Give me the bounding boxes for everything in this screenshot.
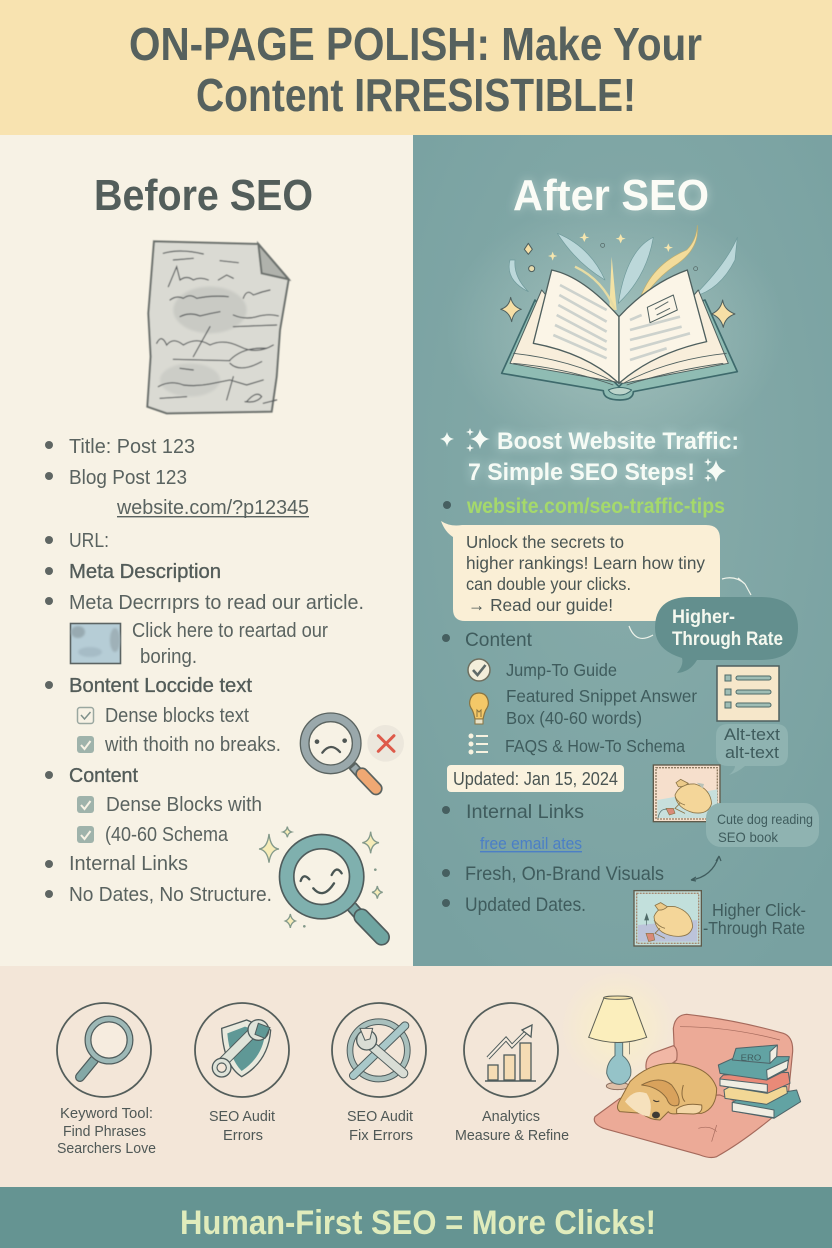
list: after SEO bullets: Updated Dates. [465,894,586,916]
headline: optimized title: Boost Website Traffic: [497,428,739,455]
image: blurry thumbnail [70,624,120,664]
callout: meta description bubble: Unlock the secrets to [466,532,624,552]
label: book cover text: ERO [741,1052,762,1062]
callout: higher through rate: Through Rate [672,629,783,650]
tool: keyword tool: Keyword Tool: [60,1105,153,1122]
callout: alt-text: Alt-text [724,725,780,744]
panel: after SEO [413,135,832,966]
caption: higher click-through rate [703,900,806,938]
list: after SEO bullets: website.com/seo-traffic-tips [466,495,725,518]
list: after SEO bullets: Featured Snippet Answer [506,686,697,706]
tool: SEO audit fix errors: SEO Audit [347,1108,414,1125]
icon: checked box [77,826,94,843]
callout: meta description bubble: can double your clicks. [466,574,631,594]
list: before SEO bullets: Meta Decrrıprs to read our article. [69,591,364,614]
list: before SEO bullets: website.com/?p12345 [116,496,309,519]
list: after SEO bullets: Content [465,629,533,651]
list: before SEO bullets: (40-60 Schema [105,823,229,846]
headline: optimized title: 7 Simple SEO Steps! [468,459,695,486]
arrow: curly connector [691,856,721,881]
list: before SEO bullets: Click here to reartad our [132,619,328,642]
tool: SEO audit errors [195,1003,289,1144]
icon: check circle [468,659,490,681]
image: dog illustration two [634,891,701,946]
list: after SEO bullets: Internal Links [466,801,584,823]
list: before SEO bullets: Blog Post 123 [69,466,187,489]
title [129,18,702,121]
tool: SEO audit fix errors [332,1003,426,1144]
tool: analytics [455,1003,569,1144]
list: before SEO bullets: Title: Post 123 [69,435,195,458]
footer banner [0,1187,832,1248]
label: updated date: Updated: Jan 15, 2024 [453,769,618,789]
icon: sleeping dog [617,1063,717,1120]
icon: crumpled document [147,241,289,413]
list: before SEO bullets: No Dates, No Structure. [69,883,272,906]
list: after SEO bullets: Jump-To Guide [506,660,617,680]
headline: optimized title: 7 Simple SEO Steps! [468,459,695,486]
icon: lamp [589,996,647,1090]
callout: higher through rate: Higher- [672,607,735,628]
list: before SEO bullets: Dense blocks text [105,704,249,727]
tool: analytics: Measure & Refine [455,1127,569,1144]
title: Content IRRESISTIBLE! [196,69,636,121]
tool: keyword tool: Searchers Love [57,1140,156,1157]
callout: alt-text: alt-text [725,743,779,762]
label: updated date [447,765,624,792]
callout: higher through rate [629,578,798,673]
icon: light bulb [470,693,488,724]
icon: couch [594,1014,793,1158]
list: before SEO bullets: URL: [69,529,109,552]
heading: before SEO: Before SEO [94,171,313,220]
list: before SEO bullets: Internal Links [69,852,188,875]
callout: meta description bubble: → Read our guide! [468,595,613,615]
callout: meta description bubble [441,521,720,621]
icon: checklist card [717,666,779,721]
list: after SEO bullets [441,495,725,916]
list: after SEO bullets: Box (40-60 words) [506,708,642,728]
icon: checked box [77,796,94,813]
illustration: sleeping dog on couch with lamp and books [560,970,801,1158]
icon: open book with sparkles [501,225,737,400]
icon: book stack [718,1045,801,1118]
list: before SEO bullets: Meta Description [69,560,221,583]
callout: cute dog reading: SEO book [718,829,779,845]
caption: higher click-through rate: Higher Click- [712,900,806,920]
tool: SEO audit fix errors: Fix Errors [349,1127,413,1144]
list: before SEO bullets [45,435,364,906]
list: before SEO bullets: Bontent Loccide text [69,674,252,697]
image: dog illustration one [653,765,720,822]
list: after SEO bullets: Fresh, On-Brand Visuals [465,863,664,885]
list: before SEO bullets: Dense Blocks with [106,793,262,816]
tool: keyword tool: Find Phrases [63,1123,146,1140]
list: before SEO bullets: with thoith no breaks. [104,733,281,756]
headline: optimized title: Boost Website Traffic: [497,428,739,455]
tool: SEO audit errors: Errors [223,1127,263,1144]
heading: after SEO: After SEO [513,171,709,220]
list: before SEO bullets: boring. [140,645,197,668]
callout: cute dog reading [706,803,819,847]
title: ON-PAGE POLISH: Make Your [129,18,702,70]
panel: before SEO [0,135,413,966]
list: before SEO bullets: Content [69,764,138,787]
list: after SEO bullets: FAQS & How-To Schema [505,736,685,756]
icon: checked box [77,736,94,753]
panel: tools row [0,966,832,1187]
footer banner: Human-First SEO = More Clicks! [180,1204,656,1242]
callout: cute dog reading: Cute dog reading [717,811,813,827]
icon: empty checkbox [78,708,94,724]
tool: keyword tool [57,1003,156,1157]
caption: higher click-through rate: -Through Rate [703,918,805,938]
icon: list [468,734,488,754]
callout: meta description bubble: higher rankings! Learn how tiny [466,553,705,573]
heading: after SEO: After SEO [513,171,709,220]
icon: happy magnifier with sparkles [259,827,383,937]
callout: alt-text [716,724,788,775]
tool: SEO audit errors: SEO Audit [209,1108,276,1125]
panel: header banner [0,0,832,135]
link: free email: free email ates [480,834,582,853]
headline: optimized title [440,428,739,486]
tool: analytics: Analytics [482,1108,540,1125]
icon: sad magnifier with red cross [305,717,404,789]
